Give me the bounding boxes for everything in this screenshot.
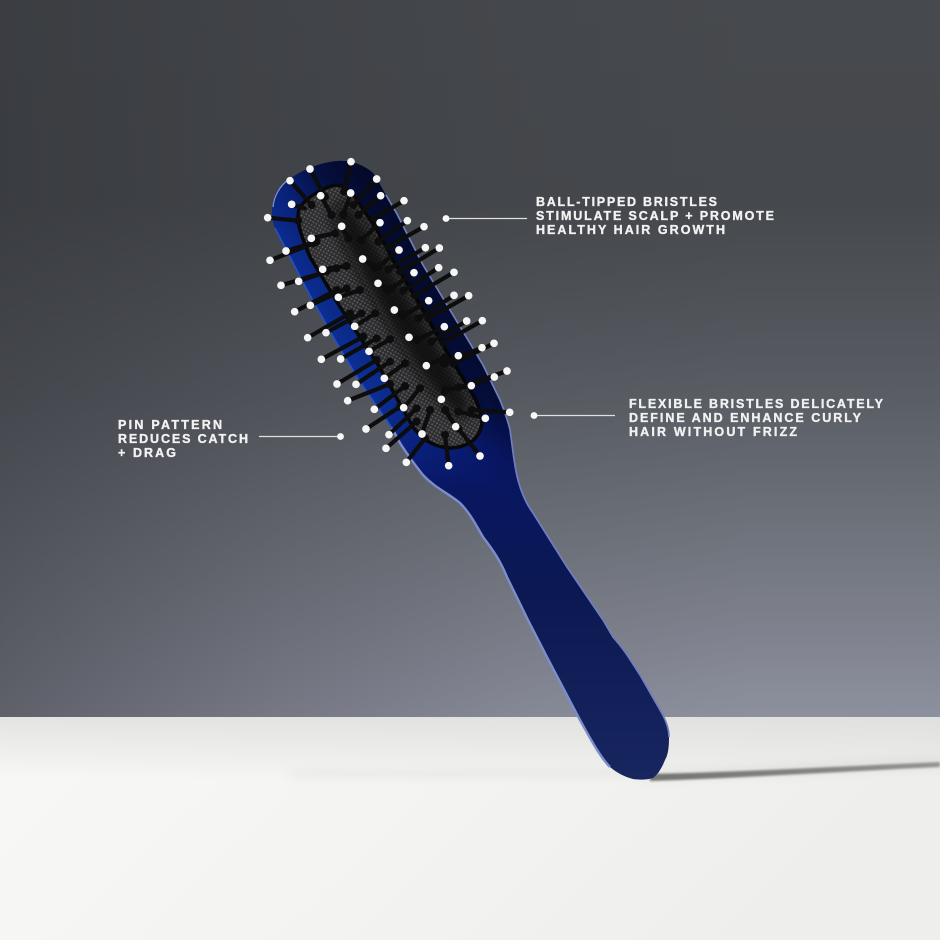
hair brush (264, 158, 669, 780)
left head edge highlight (275, 228, 392, 428)
brush cast shadow (290, 759, 940, 781)
callout text: pin pattern: + DRAG (118, 446, 176, 460)
pad centre shadow (330, 200, 471, 417)
right rim highlight (386, 195, 669, 737)
bristle bases (298, 192, 477, 438)
callout text: pin pattern: PIN PATTERN (118, 418, 222, 432)
callout text: flexible bristles: HAIR WITHOUT FRIZZ (629, 425, 797, 439)
callout text: ball-tipped bristles (536, 195, 774, 237)
callout text: ball-tipped bristles: STIMULATE SCALP + PROMOTE (536, 209, 774, 223)
callout text: ball-tipped bristles: HEALTHY HAIR GROWTH (536, 223, 725, 237)
callout text: ball-tipped bristles: BALL-TIPPED BRISTLES (536, 195, 717, 209)
leader line: pin pattern (259, 433, 344, 440)
leader line: flexible bristles (531, 412, 615, 419)
gloss highlight (273, 180, 288, 207)
leader line: ball-tipped bristles (443, 215, 527, 222)
table surface (0, 717, 940, 940)
bristles (268, 162, 510, 466)
background wall (0, 0, 940, 718)
callout: ball-tipped bristles (443, 195, 774, 237)
callout text: pin pattern (118, 418, 248, 460)
callout text: pin pattern: REDUCES CATCH (118, 432, 248, 446)
brush head colour (272, 160, 514, 474)
callout text: flexible bristles (629, 397, 884, 439)
brush body and handle (272, 161, 669, 780)
ball tips (264, 158, 513, 469)
rubber pad (298, 185, 482, 448)
callout text: flexible bristles: DEFINE AND ENHANCE CURLY (629, 411, 862, 425)
callout: flexible bristles (531, 397, 884, 439)
left handle rim highlight (392, 428, 610, 767)
callout text: flexible bristles: FLEXIBLE BRISTLES DELICATELY (629, 397, 884, 411)
callout: pin pattern (118, 418, 344, 460)
